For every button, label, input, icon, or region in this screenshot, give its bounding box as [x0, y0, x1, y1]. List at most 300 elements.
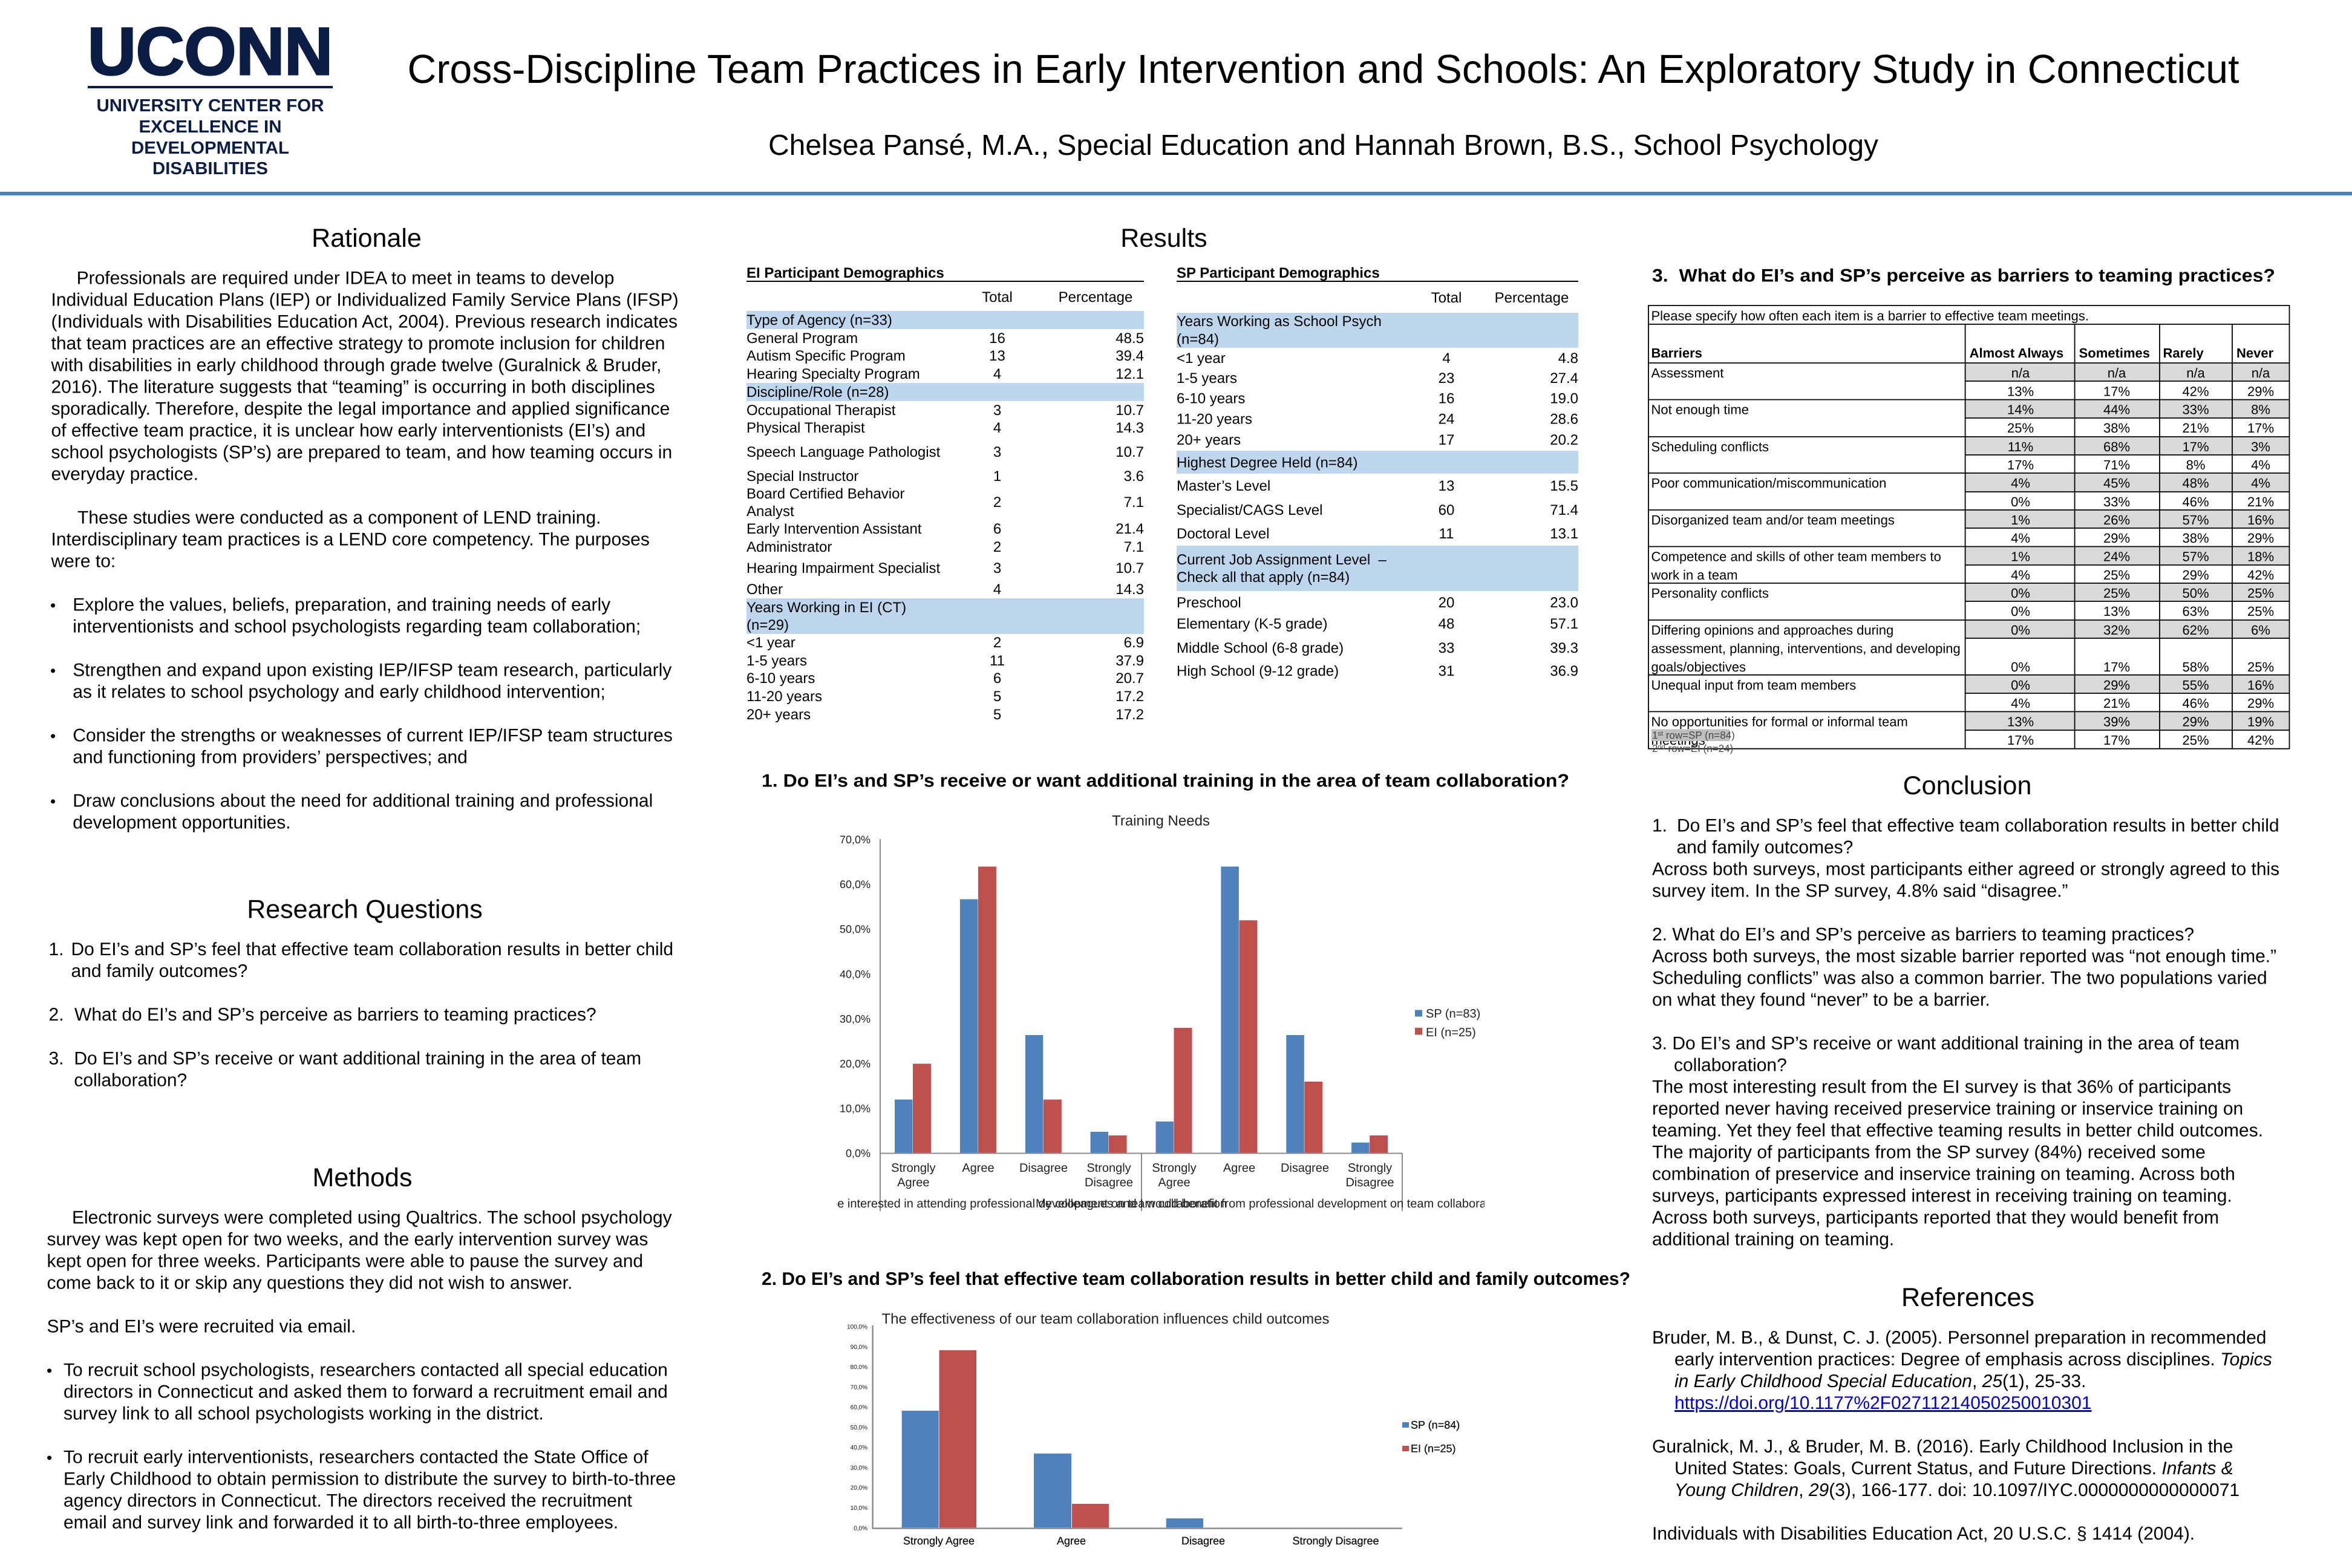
reference: Bruder and Dunst: early intervention practices: Degree of emphasis across disciplines. Topics: [1674, 1350, 2272, 1370]
row: poor communication: 0%: [2011, 494, 2030, 509]
row: disorganized team: 16%: [2247, 512, 2274, 528]
heading: question 3 table: 3. What do EI’s and SP’s perceive as barriers to teaming practices?: [1652, 266, 2275, 286]
table: SP participant demographics: 6-10 years: [1177, 391, 1245, 407]
category labels: Strongly Disagree: [1292, 1535, 1379, 1547]
text block: conclusion question 1: Do EI’s and SP’s feel that effective team collaboration results in better child: [1677, 815, 2279, 835]
y axis labels: 80,0%: [851, 1364, 867, 1371]
y axis labels: 50,0%: [840, 923, 871, 935]
text block: rationale paragraphs: (Individuals with Disabilities Education Act, 2004). Previous research indicates: [51, 312, 678, 332]
axes: [880, 839, 1402, 1211]
text block: methods paragraphs: Electronic surveys were completed using Qualtrics. The school psychology: [72, 1208, 672, 1228]
row: scheduling conflicts: 8%: [2186, 457, 2205, 472]
row: scheduling conflicts: 11%: [2008, 439, 2033, 454]
table: barriers to team meetings: [1648, 305, 2289, 754]
row: scheduling conflicts: 17%: [2182, 439, 2209, 454]
bullet list: purposes: interventionists and school psychologists regarding team collaboration;: [73, 616, 641, 636]
row: personality conflicts: 50%: [2182, 586, 2209, 601]
text block: methods paragraphs: SP’s and EI’s were recruited via email.: [47, 1317, 356, 1337]
bullet list: recruitment: •: [47, 1361, 52, 1379]
row: not enough time: 8%: [2251, 402, 2270, 417]
text block: rationale paragraphs: with disabilities in early childhood through grade twelve (Guralnick & Bruder,: [51, 355, 661, 375]
bullet list: recruitment: •: [47, 1448, 52, 1466]
table: EI participant demographics: 5: [993, 688, 1001, 705]
category labels: [903, 1535, 1379, 1547]
table: SP participant demographics: Master’s Level: [1177, 478, 1270, 494]
table: EI participant demographics: 6: [993, 521, 1001, 537]
row: no opportunities: 13%: [2007, 714, 2034, 729]
list: research questions: 3.: [48, 1049, 64, 1068]
row: not enough time: [1651, 402, 2274, 436]
text block: rationale paragraphs: [51, 268, 679, 571]
table: EI participant demographics: 2: [993, 539, 1001, 555]
row: assessment: n/a: [2011, 365, 2030, 381]
table: SP participant demographics: 4: [1442, 350, 1451, 367]
legend: [1415, 1007, 1480, 1039]
table: EI participant demographics: 1-5 years: [746, 653, 807, 669]
table: EI participant demographics: 10.7: [1116, 402, 1144, 419]
row: not enough time: 17%: [2247, 420, 2274, 436]
row: no opportunities: 25%: [2182, 733, 2209, 748]
y axis labels: 40,0%: [851, 1445, 867, 1451]
row: disorganized team: [1651, 512, 2274, 546]
table: SP participant demographics: 33: [1439, 640, 1454, 656]
table: EI participant demographics: 11-20 years: [746, 688, 822, 705]
table: SP participant demographics: Check all that apply (n=84): [1177, 569, 1350, 586]
bullet list: purposes: •: [50, 727, 56, 745]
row: not enough time: Not enough time: [1651, 402, 1749, 417]
table: EI participant demographics: Analyst: [746, 503, 794, 520]
list: research questions: 1.: [48, 939, 64, 959]
table: EI participant demographics: 20.7: [1116, 670, 1144, 687]
y axis labels: 70,0%: [840, 834, 871, 846]
y axis labels: 50,0%: [851, 1425, 867, 1431]
table: EI participant demographics: Administrator: [746, 539, 832, 555]
text block: rationale paragraphs: were to:: [51, 551, 116, 571]
table: SP participant demographics: 19.0: [1550, 391, 1578, 407]
table: EI participant demographics: 12.1: [1116, 366, 1144, 382]
reference: IDEA: Individuals with Disabilities Education Act, 20 U.S.C. § 1414 (2004).: [1652, 1524, 2195, 1544]
table: SP participant demographics: Total: [1431, 290, 1462, 306]
table: EI participant demographics: 4: [993, 366, 1001, 382]
legend: SP (n=83): [1426, 1007, 1480, 1021]
table: SP participant demographics: 27.4: [1550, 370, 1578, 387]
row: disorganized team: 38%: [2182, 531, 2209, 546]
logo: UConn University Center for Excellence: DISABILITIES: [152, 159, 268, 178]
row: no opportunities: 17%: [2007, 733, 2034, 748]
row: scheduling conflicts: 4%: [2251, 457, 2270, 472]
category labels: Agree: [1057, 1535, 1086, 1547]
table: EI participant demographics: 17.2: [1116, 688, 1144, 705]
table: EI participant demographics: 10.7: [1116, 444, 1144, 460]
table grid: [1648, 305, 2289, 749]
row: poor communication: 33%: [2103, 494, 2130, 509]
logo: UConn University Center for Excellence: UCONN: [88, 14, 333, 89]
row: scheduling conflicts: 17%: [2007, 457, 2034, 472]
row: assessment: 29%: [2247, 384, 2274, 399]
table: SP participant demographics: 48: [1439, 616, 1454, 632]
table: EI participant demographics: 13: [989, 348, 1005, 364]
heading: rationale: Rationale: [312, 224, 422, 253]
bars: SP series: [902, 1411, 1203, 1527]
column headers: Sometimes: [2079, 345, 2150, 361]
bars: SP series: [895, 866, 1370, 1153]
table: EI participant demographics: 5: [993, 707, 1001, 723]
text block: conclusion question 3: additional training on teaming.: [1652, 1229, 1894, 1249]
row: poor communication: 45%: [2103, 475, 2130, 491]
reference: Guralnick and Bruder: Guralnick, M. J., & Bruder, M. B. (2016). Early Childhood Inclusion in the: [1652, 1437, 2233, 1457]
text block: conclusion question 2: [1652, 924, 2276, 1010]
bar chart: team collaboration influences child outcomes: [847, 1311, 1460, 1547]
row: unequal input: Unequal input from team members: [1651, 678, 1856, 693]
category labels: Disagree: [1345, 1176, 1394, 1189]
table: SP participant demographics: High School (9-12 grade): [1177, 663, 1339, 679]
table: EI participant demographics: Type of Agency (n=33): [746, 312, 892, 328]
table: EI participant demographics: Board Certified Behavior: [746, 486, 904, 502]
bullet list: recruitment: email and survey link and forwarded it to all birth-to-three employees.: [64, 1512, 618, 1533]
table: SP participant demographics: 16: [1439, 391, 1454, 407]
heading: methods: Methods: [313, 1163, 412, 1192]
heading: research questions: Research Questions: [247, 895, 483, 924]
row: competence and skills: 25%: [2103, 567, 2130, 583]
text block: conclusion question 3: surveys, participants expressed interest in receiving training on teaming.: [1652, 1186, 2232, 1206]
bullet list: recruitment: To recruit school psychologists, researchers contacted all special education: [64, 1360, 668, 1380]
reference: Guralnick and Bruder: United States: Goals, Current Status, and Future Directions. Infants &: [1674, 1459, 2233, 1478]
header rule: [0, 192, 2352, 195]
list: research questions: Do EI’s and SP’s receive or want additional training in the area of team: [74, 1049, 641, 1068]
y axis labels: 100,0%: [847, 1324, 867, 1331]
category labels: Agree: [1158, 1176, 1191, 1189]
row: unequal input: [1651, 678, 2274, 711]
row: scheduling conflicts: Scheduling conflicts: [1651, 439, 1769, 454]
y axis labels: 60,0%: [851, 1405, 867, 1411]
row: scheduling conflicts: 68%: [2103, 439, 2130, 454]
row: disorganized team: 29%: [2103, 531, 2130, 546]
row: differing opinions: 32%: [2103, 622, 2130, 638]
chart title: Training Needs: [1112, 813, 1210, 829]
row: differing opinions: 6%: [2251, 622, 2270, 638]
text block: conclusion question 3: collaboration?: [1674, 1055, 1787, 1075]
row: no opportunities: 39%: [2103, 714, 2130, 729]
panel: conclusion: [1652, 771, 2279, 1249]
reference: Bruder and Dunst: Bruder, M. B., & Dunst, C. J. (2005). Personnel preparation in recommended: [1652, 1328, 2266, 1348]
text block: conclusion question 1: [1652, 815, 2279, 901]
list: research questions: Do EI’s and SP’s feel that effective team collaboration results in better child: [71, 939, 673, 959]
bullet list: purposes: [50, 595, 673, 832]
row: disorganized team: 26%: [2103, 512, 2130, 528]
heading: question 1 chart: 1. Do EI’s and SP’s receive or want additional training in the area of team collaboration?: [762, 771, 1569, 791]
row: personality conflicts: 0%: [2011, 604, 2030, 619]
row: scheduling conflicts: 71%: [2103, 457, 2130, 472]
logo: UConn University Center for Excellence: EXCELLENCE IN: [139, 117, 282, 137]
text block: rationale paragraphs: everyday practice.: [51, 464, 198, 484]
bullet list: purposes: development opportunities.: [73, 812, 291, 832]
row: personality conflicts: 25%: [2103, 586, 2130, 601]
row: unequal input: 29%: [2247, 696, 2274, 711]
panel: methods: [47, 1163, 676, 1533]
row: poor communication: 21%: [2247, 494, 2274, 509]
text block: conclusion question 3: teaming. Yet they feel that effective teaming results in better child outcomes.: [1652, 1120, 2263, 1140]
table: EI participant demographics: Hearing Impairment Specialist: [746, 560, 940, 577]
row: competence and skills: 24%: [2103, 549, 2130, 564]
bullet list: purposes: Explore the values, beliefs, preparation, and training needs of early: [73, 595, 610, 615]
text block: rationale paragraphs: of effective team practice, it is unclear how early interventionists (EI’s) and: [51, 420, 645, 440]
table: SP participant demographics: 20+ years: [1177, 432, 1241, 448]
row: differing opinions: [1651, 622, 2274, 675]
table: EI participant demographics: EI Participant Demographics: [746, 265, 944, 281]
text block: rationale paragraphs: Interdisciplinary team practices is a LEND core competency. The purposes: [51, 529, 650, 549]
text block: methods paragraphs: survey was kept open for two weeks, and the early intervention survey was: [47, 1230, 648, 1250]
table: SP participant demographics: 71.4: [1550, 502, 1578, 518]
table: SP participant demographics: 39.3: [1550, 640, 1578, 656]
row: differing opinions: 58%: [2182, 659, 2209, 675]
table: SP participant demographics: 13: [1439, 478, 1454, 494]
panel: rationale: [50, 224, 679, 832]
y axis labels: 40,0%: [840, 968, 871, 980]
table: EI participant demographics: 4: [993, 420, 1001, 436]
category labels: Strongly: [891, 1161, 935, 1175]
text block: rationale paragraphs: sporadically. Therefore, despite the legal importance and applied significance: [51, 399, 670, 419]
bars: EI series: [939, 1350, 1109, 1527]
text block: conclusion question 2: on what they found “never” to be a barrier.: [1652, 990, 1990, 1010]
table: SP participant demographics: 57.1: [1550, 616, 1578, 632]
table: EI participant demographics: Physical Therapist: [746, 420, 865, 436]
table: EI participant demographics: 21.4: [1116, 521, 1144, 537]
table: SP participant demographics: <1 year: [1177, 350, 1226, 367]
panel: references: [1652, 1283, 2272, 1544]
row: scheduling conflicts: [1651, 439, 2270, 472]
list: research questions: What do EI’s and SP’s perceive as barriers to teaming practices?: [74, 1005, 596, 1025]
bars: EI series: [913, 866, 1388, 1153]
table: EI participant demographics: 6-10 years: [746, 670, 815, 687]
table: EI participant demographics: Hearing Specialty Program: [746, 366, 920, 382]
text block: rationale paragraphs: These studies were conducted as a component of LEND training.: [77, 508, 601, 528]
text block: conclusion question 3: 3. Do EI’s and SP’s receive or want additional training in the area of team: [1652, 1033, 2239, 1053]
table caption: Please specify how often each item is a barrier to effective team meetings.: [1651, 309, 2089, 323]
logo: UConn University Center for Excellence: [88, 14, 333, 178]
row: personality conflicts: 13%: [2103, 604, 2130, 619]
note: row key: 1: [1652, 730, 1658, 741]
table: SP participant demographics: 11: [1439, 526, 1454, 542]
note: row key: row=EI (n=24): [1665, 743, 1733, 754]
table: EI participant demographics: 3: [993, 560, 1001, 577]
table: SP participant demographics: Elementary (K-5 grade): [1177, 616, 1327, 632]
table: SP participant demographics: 20.2: [1550, 432, 1578, 448]
row: differing opinions: Differing opinions and approaches during: [1651, 622, 1893, 638]
table: EI participant demographics: Discipline/Role (n=28): [746, 384, 889, 400]
row: differing opinions: assessment, planning, interventions, and developing: [1651, 641, 1961, 656]
row: no opportunities: 29%: [2182, 714, 2209, 729]
row: competence and skills: [1650, 549, 2274, 583]
table: SP participant demographics: 24: [1439, 411, 1454, 427]
row: competence and skills: 57%: [2182, 549, 2209, 564]
bullet list: purposes: and functioning from providers’ perspectives; and: [73, 747, 468, 767]
y axis labels: 30,0%: [840, 1013, 871, 1025]
category labels: [891, 1161, 1394, 1189]
chart title: The effectiveness of our team collaboration influences child outcomes: [882, 1311, 1330, 1327]
table: EI participant demographics: 3: [993, 444, 1001, 460]
y axis labels: [847, 1324, 867, 1532]
row: assessment: [1651, 365, 2274, 399]
note: row key: st: [1658, 730, 1663, 737]
row: disorganized team: 1%: [2011, 512, 2030, 528]
legend: [1402, 1419, 1460, 1455]
table: EI participant demographics: 6.9: [1124, 635, 1144, 651]
row: differing opinions: 25%: [2247, 659, 2274, 675]
table: SP participant demographics: Highest Degree Held (n=84): [1177, 455, 1357, 471]
category labels: Strongly Agree: [903, 1535, 975, 1547]
row: no opportunities: 19%: [2247, 714, 2274, 729]
table: SP participant demographics: 28.6: [1550, 411, 1578, 427]
y axis labels: 30,0%: [851, 1465, 867, 1471]
list: research questions: collaboration?: [74, 1071, 187, 1090]
text block: conclusion question 3: The majority of participants from the SP survey (84%) received some: [1652, 1142, 2206, 1162]
table: EI participant demographics: 2: [993, 494, 1001, 511]
row: unequal input: 21%: [2103, 696, 2130, 711]
row: personality conflicts: 63%: [2182, 604, 2209, 619]
text block: conclusion question 2: Scheduling conflicts” was also a common barrier. The two populations varied: [1652, 968, 2267, 988]
row: no opportunities: [1651, 714, 2274, 748]
table: SP participant demographics: Doctoral Level: [1177, 526, 1269, 542]
table: EI participant demographics: 39.4: [1116, 348, 1144, 364]
table: SP participant demographics: 11-20 years: [1177, 411, 1252, 427]
table: EI participant demographics: Percentage: [1059, 289, 1132, 305]
table: SP participant demographics: SP Participant Demographics: [1177, 265, 1380, 281]
table: EI participant demographics: 7.1: [1124, 494, 1144, 511]
category labels: Disagree: [1085, 1176, 1133, 1189]
table: EI participant demographics: 3.6: [1124, 468, 1144, 485]
table: SP participant demographics: Current Job Assignment Level –: [1177, 552, 1387, 568]
list: research questions: 2.: [48, 1005, 64, 1025]
bullet list: purposes: as it relates to school psychology and early childhood intervention;: [73, 682, 606, 702]
table: EI participant demographics: <1 year: [746, 635, 795, 651]
table: EI participant demographics: 10.7: [1116, 560, 1144, 577]
table: EI participant demographics: (n=29): [746, 617, 789, 633]
text block: conclusion question 3: Across both surveys, participants reported that they would benefit from: [1652, 1207, 2219, 1227]
row: unequal input: 29%: [2103, 678, 2130, 693]
table: EI participant demographics: Occupational Therapist: [746, 402, 896, 419]
row: differing opinions: 17%: [2103, 659, 2130, 675]
row: assessment: 17%: [2103, 384, 2130, 399]
table: EI participant demographics: 2: [993, 635, 1001, 651]
category labels: Agree: [962, 1161, 995, 1175]
bullet list: recruitment: [47, 1360, 676, 1533]
heading: references: References: [1901, 1283, 2034, 1312]
table: EI participant demographics: 3: [993, 402, 1001, 419]
bullet list: purposes: Draw conclusions about the need for additional training and professional: [73, 791, 653, 811]
row: not enough time: 38%: [2103, 420, 2130, 436]
y axis labels: 0,0%: [854, 1525, 867, 1532]
y axis labels: 0,0%: [846, 1147, 871, 1159]
bullet list: purposes: •: [50, 661, 56, 679]
row: assessment: n/a: [2252, 365, 2270, 381]
table: SP participant demographics: 60: [1439, 502, 1454, 518]
row: disorganized team: 29%: [2247, 531, 2274, 546]
row: disorganized team: 4%: [2011, 531, 2030, 546]
y axis labels: 20,0%: [840, 1057, 871, 1070]
row: poor communication: 48%: [2182, 475, 2209, 491]
table: SP participant demographics: 23: [1439, 370, 1454, 387]
title: Cross-Discipline Team Practices in Early Intervention and Schools: An Exploratory Study in Connecticut: [408, 47, 2239, 92]
group label: interested in attending: I would be interested in attending professional development on team collaboration: [789, 1197, 1227, 1210]
row: assessment: n/a: [2108, 365, 2126, 381]
category labels: Disagree: [1181, 1535, 1225, 1547]
table: EI participant demographics: Early Intervention Assistant: [746, 521, 922, 537]
row: competence and skills: 18%: [2247, 549, 2274, 564]
row: competence and skills: 29%: [2182, 567, 2209, 583]
row: assessment: 13%: [2007, 384, 2034, 399]
row: differing opinions: 0%: [2011, 622, 2030, 638]
category labels: Agree: [897, 1176, 929, 1189]
table: SP participant demographics: 13.1: [1550, 526, 1578, 542]
table: EI participant demographics: 1: [993, 468, 1001, 485]
row: competence and skills: work in a team: [1650, 567, 1738, 583]
row: competence and skills: 4%: [2011, 567, 2030, 583]
table: EI participant demographics: Other: [746, 581, 783, 598]
text block: conclusion question 3: [1652, 1033, 2263, 1249]
row: not enough time: 44%: [2103, 402, 2130, 417]
row: differing opinions: 62%: [2182, 622, 2209, 638]
column headers: [1651, 345, 2274, 361]
row: no opportunities: No opportunities for formal or informal team: [1651, 714, 1908, 729]
legend: EI (n=25): [1426, 1026, 1476, 1039]
table: EI participant demographics: 14.3: [1116, 420, 1144, 436]
table: EI participant demographics: 11: [990, 653, 1005, 669]
row: poor communication: 4%: [2251, 475, 2270, 491]
row: poor communication: Poor communication/miscommunication: [1651, 475, 1886, 491]
row: unequal input: 46%: [2182, 696, 2209, 711]
text block: conclusion question 1: 1.: [1652, 815, 1667, 835]
list: research questions: and family outcomes?: [71, 961, 247, 981]
text block: conclusion question 3: The most interesting result from the EI survey is that 36% of participants: [1652, 1077, 2231, 1097]
reference: Bruder and Dunst: [1652, 1328, 2272, 1413]
bullet list: purposes: Consider the strengths or weaknesses of current IEP/IFSP team structures: [73, 725, 673, 745]
table: EI participant demographics: 48.5: [1116, 330, 1144, 347]
note: row key: [1651, 730, 1735, 754]
table: EI participant demographics: Autism Specific Program: [746, 348, 906, 364]
legend: EI (n=25): [1411, 1443, 1456, 1455]
y axis labels: 90,0%: [851, 1344, 867, 1351]
reference: Bruder and Dunst: https://doi.org/10.1177%2F02711214050250010301: [1674, 1393, 2091, 1413]
table: SP participant demographics: 20: [1439, 595, 1454, 611]
note: row key: nd: [1658, 743, 1665, 751]
row: disorganized team: Disorganized team and/or team meetings: [1651, 512, 1895, 528]
legend: SP (n=84): [1411, 1419, 1460, 1431]
table: EI participant demographics: 7.1: [1124, 539, 1144, 555]
y axis labels: 60,0%: [840, 878, 871, 890]
heading: conclusion: Conclusion: [1903, 771, 2031, 800]
table: EI participant demographics: 20+ years: [746, 707, 811, 723]
row: poor communication: 46%: [2182, 494, 2209, 509]
bullet list: purposes: •: [50, 596, 56, 614]
table: EI participant demographics: Total: [982, 289, 1013, 305]
category labels: Agree: [1223, 1161, 1255, 1175]
row: no opportunities: 42%: [2247, 733, 2274, 748]
row: personality conflicts: 0%: [2011, 586, 2030, 601]
table: EI participant demographics: General Program: [746, 330, 858, 347]
table: SP participant demographics: 17: [1439, 432, 1454, 448]
bullet list: recruitment: survey link to all school psychologists working in the district.: [64, 1403, 544, 1424]
row: personality conflicts: 25%: [2247, 586, 2274, 601]
bullet list: recruitment: directors in Connecticut and asked them to forward a recruitment email and: [64, 1382, 668, 1402]
text block: conclusion question 2: 2. What do EI’s and SP’s perceive as barriers to teaming practices?: [1652, 924, 2194, 944]
row: unequal input: 0%: [2011, 678, 2030, 693]
text block: rationale paragraphs: Professionals are required under IDEA to meet in teams to develop: [77, 268, 614, 288]
y axis labels: 70,0%: [851, 1384, 867, 1391]
table: SP participant demographics: 36.9: [1550, 663, 1578, 679]
panel: research questions: [48, 895, 673, 1090]
row: not enough time: 14%: [2007, 402, 2034, 417]
note: row key: row=SP (n=84): [1663, 730, 1735, 741]
